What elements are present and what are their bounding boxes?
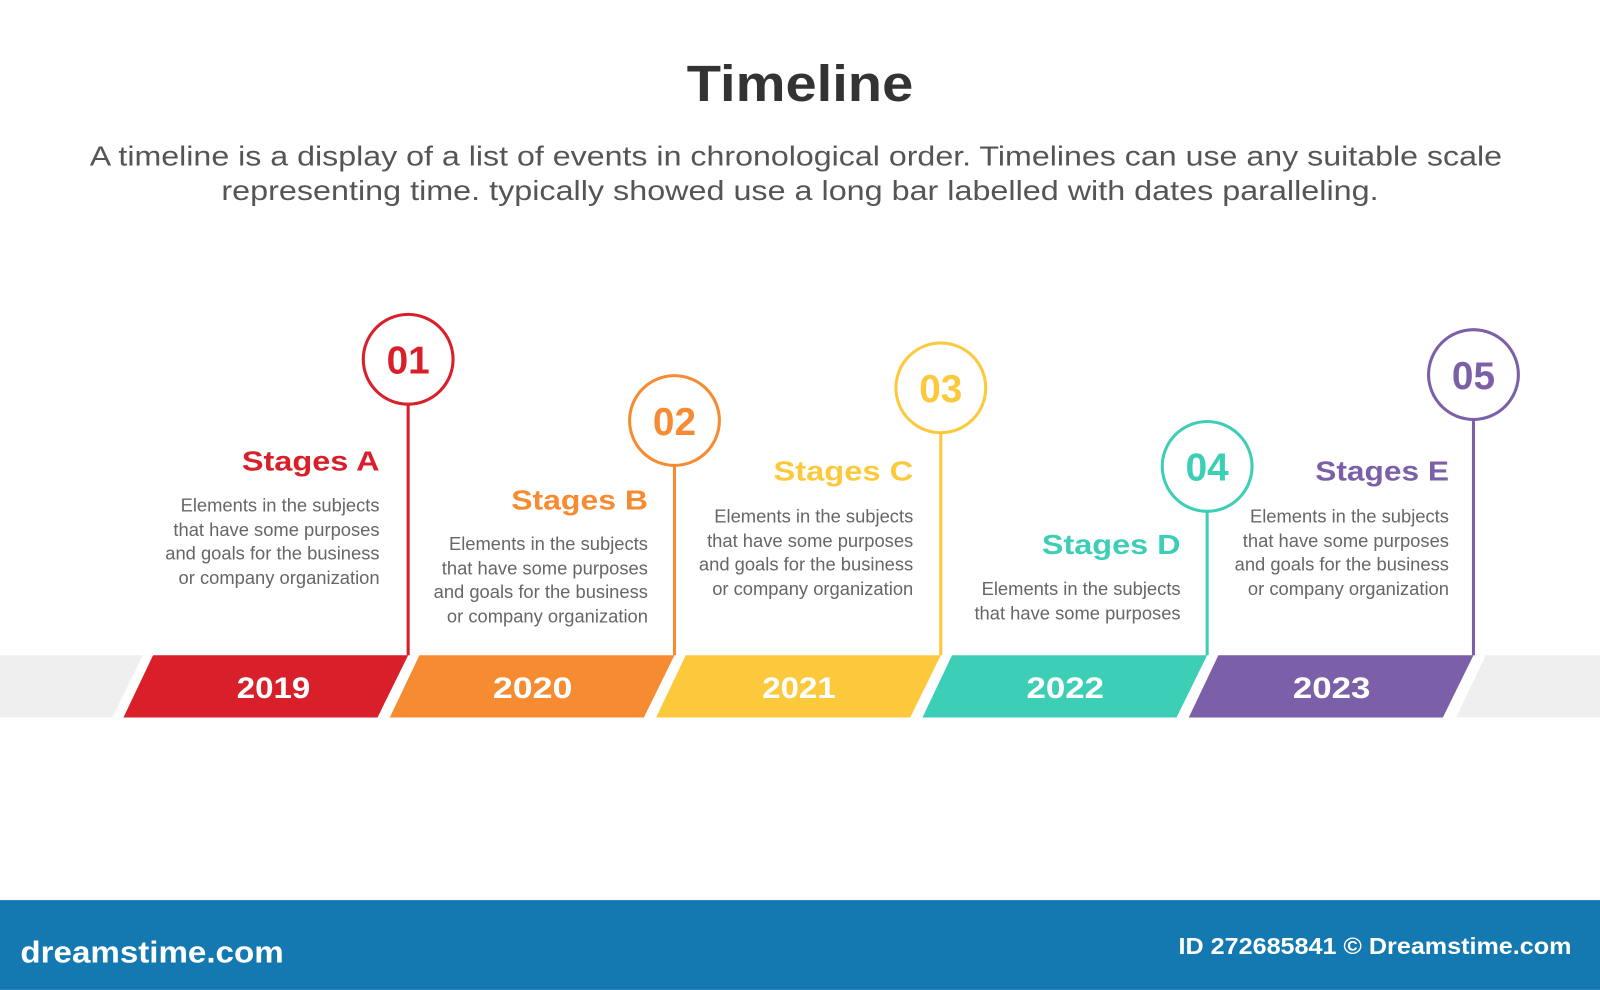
stage 5: 05: [1452, 355, 1495, 398]
stage 3: [656, 343, 986, 717]
stage 2: 2020: [493, 672, 572, 705]
stage 5: or company organization: [1248, 578, 1449, 599]
stage 2: Stages B: [511, 484, 648, 515]
stage 5: Elements in the subjects: [1250, 506, 1449, 527]
footer banner: dreamstime.com: [20, 935, 284, 969]
stage 5: [1189, 330, 1518, 717]
stage 1: that have some purposes: [173, 519, 380, 540]
title: Timeline: [687, 55, 913, 112]
stage 2: that have some purposes: [442, 558, 648, 579]
stage 1: Stages A: [242, 446, 380, 477]
stage 5: that have some purposes: [1243, 530, 1449, 551]
stage 4: Elements in the subjects: [982, 578, 1181, 599]
subtitle: representing time. typically showed use a long bar labelled with dates paralleling.: [221, 175, 1379, 206]
stage 4: 04: [1186, 447, 1229, 490]
subtitle: A timeline is a display of a list of events in chronological order. Timelines can use any suitable scale: [90, 140, 1502, 171]
stage 3: that have some purposes: [707, 530, 913, 551]
stage 4: [922, 422, 1252, 717]
stage 1: 2019: [237, 672, 310, 705]
stage 2: and goals for the business: [434, 581, 648, 602]
stage 3: and goals for the business: [699, 554, 913, 575]
stage 2: [390, 376, 719, 717]
stage 2: or company organization: [447, 606, 648, 627]
stage 1: and goals for the business: [165, 542, 380, 563]
stage 5: 2023: [1293, 672, 1370, 705]
footer banner: ID 272685841 © Dreamstime.com: [1179, 933, 1571, 959]
stage 3: Stages C: [773, 456, 913, 487]
stage 1: or company organization: [179, 567, 380, 588]
subtitle: [90, 140, 1502, 206]
stage 5: and goals for the business: [1235, 554, 1449, 575]
stage 2: 02: [653, 401, 696, 444]
stage 1: 01: [387, 340, 430, 383]
stage 3: 2021: [762, 672, 836, 705]
stage 1: [123, 314, 453, 717]
stage 2: Elements in the subjects: [449, 533, 648, 554]
stage 1: Elements in the subjects: [181, 494, 380, 515]
stage 3: 03: [919, 368, 962, 411]
stage 3: Elements in the subjects: [714, 506, 913, 527]
stage 3: or company organization: [712, 578, 913, 599]
stage 4: Stages D: [1042, 529, 1181, 560]
stage 4: 2022: [1027, 672, 1104, 705]
stage 4: that have some purposes: [974, 602, 1181, 623]
grey band: [0, 655, 1600, 717]
footer banner: [0, 900, 1600, 990]
stage 5: Stages E: [1315, 456, 1449, 487]
